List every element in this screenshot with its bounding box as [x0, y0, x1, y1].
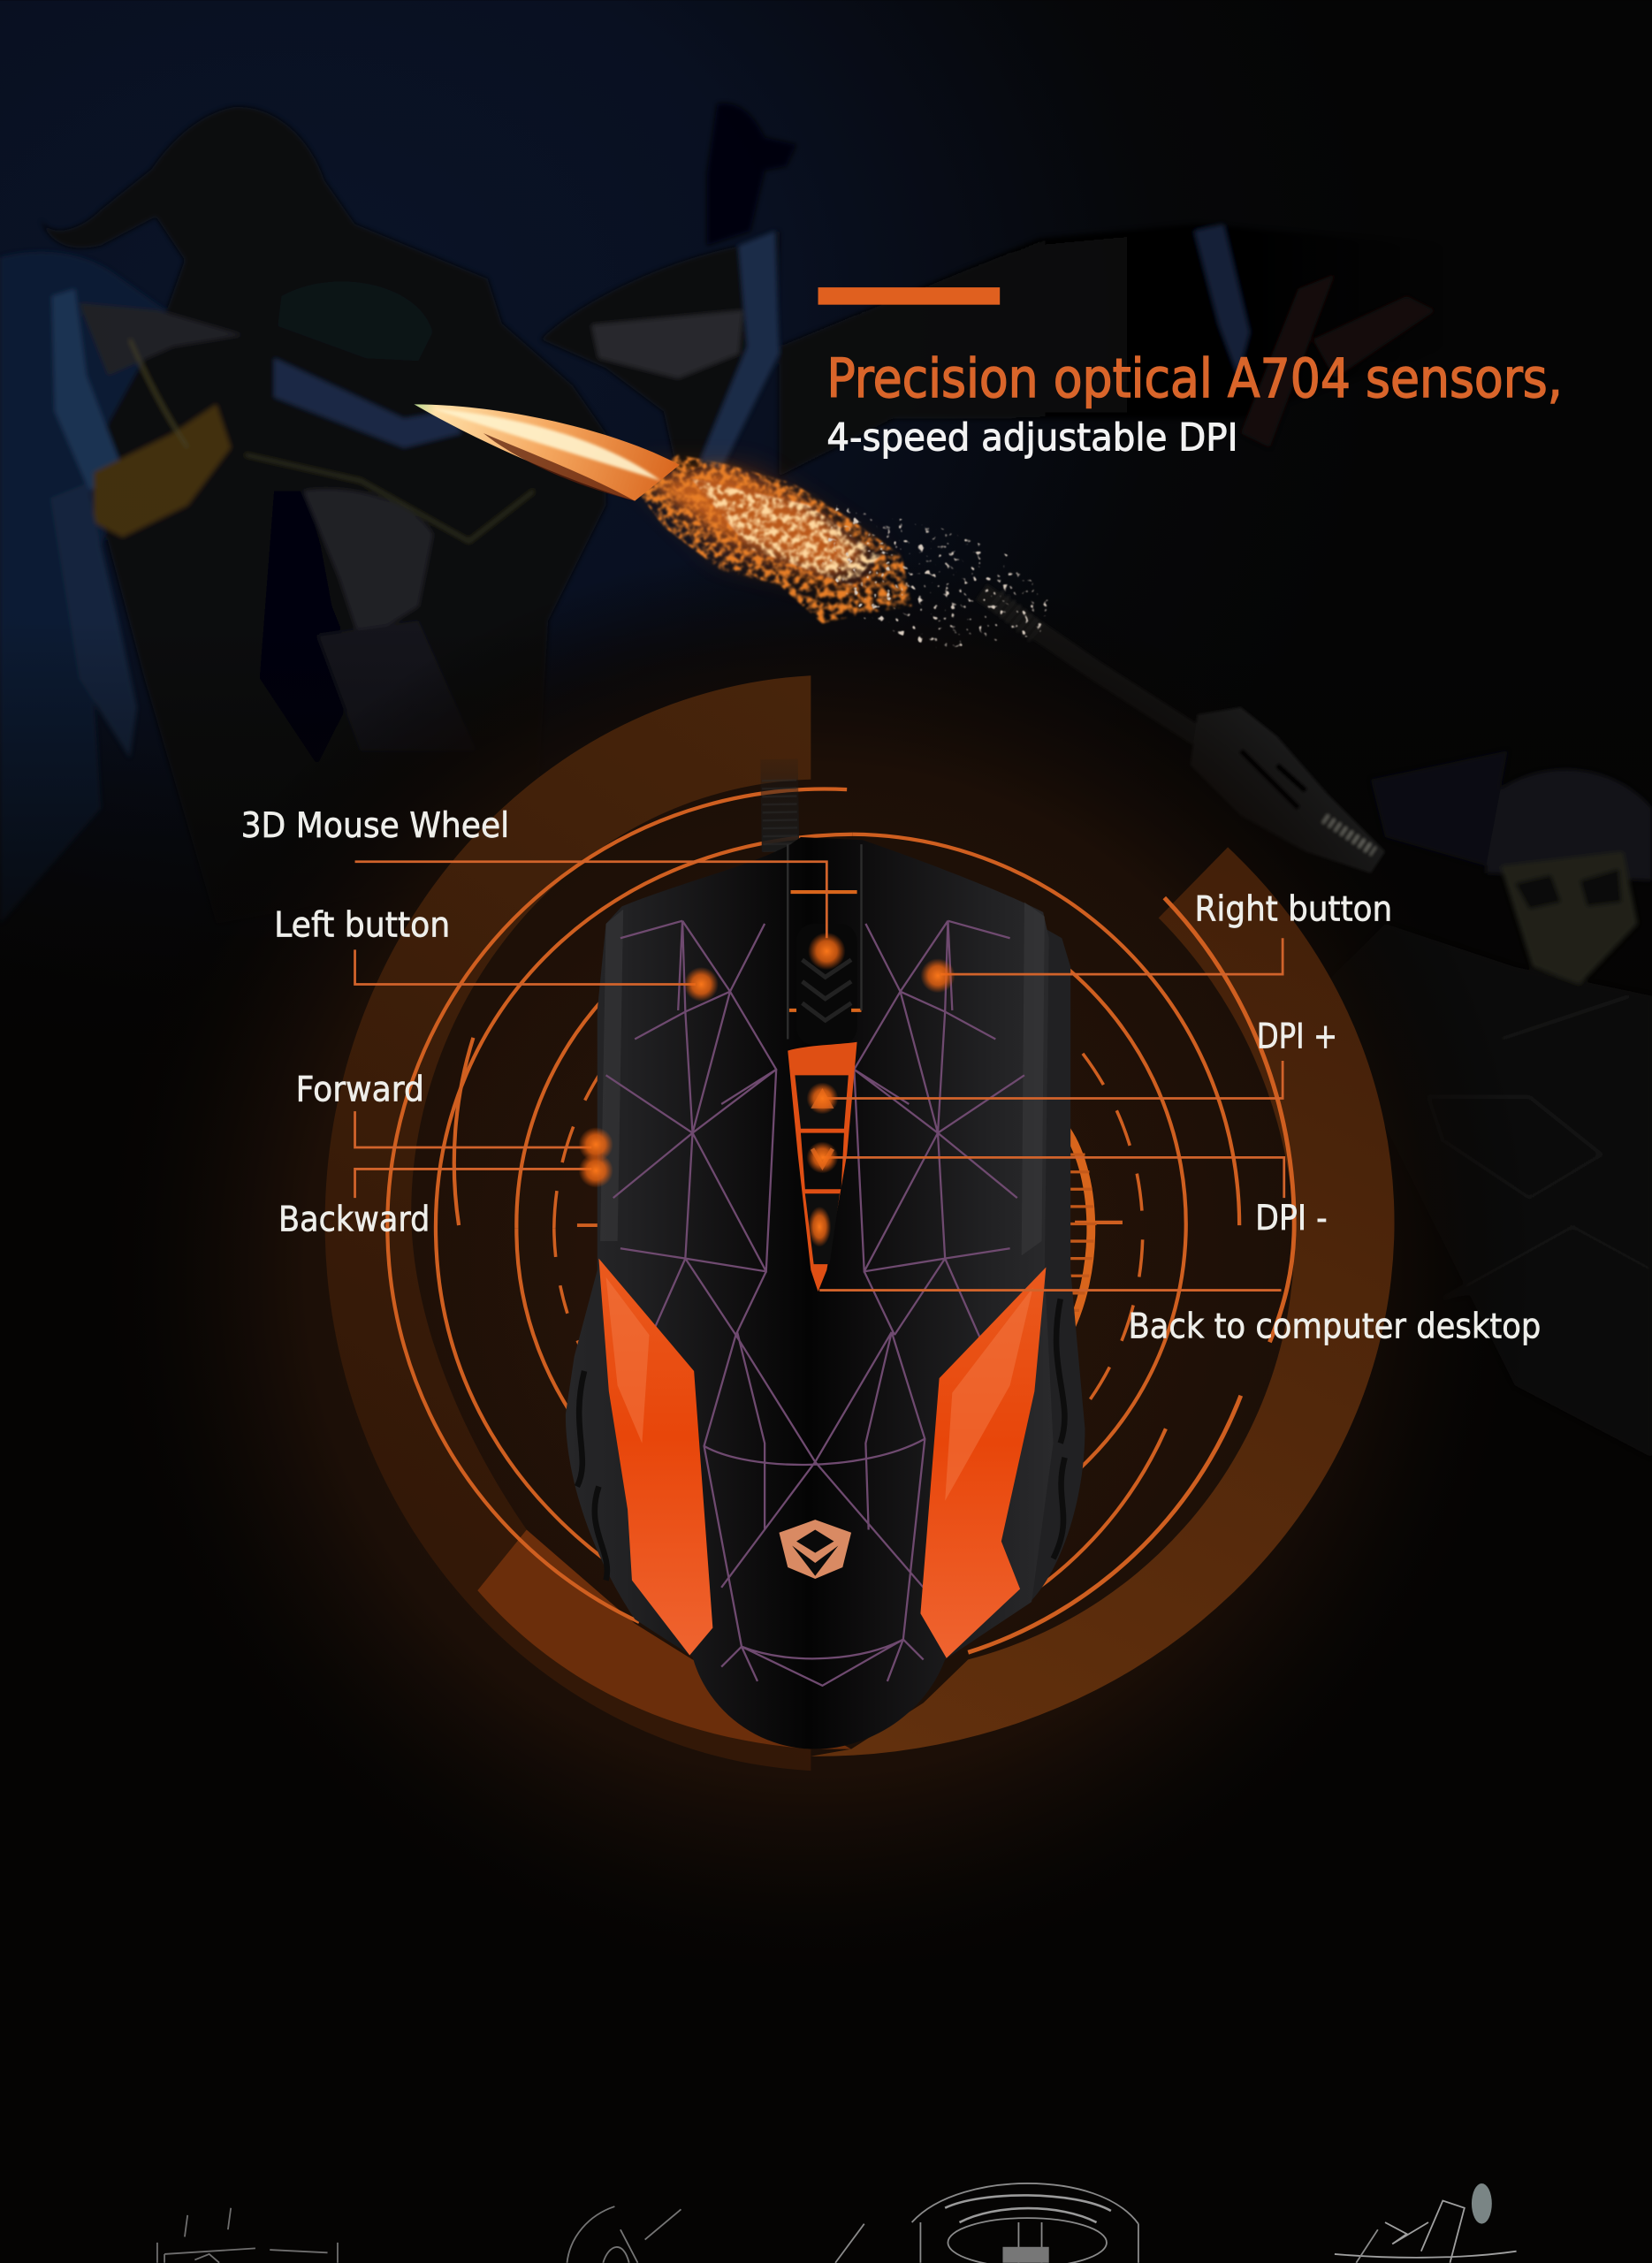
center orange strip	[788, 1042, 857, 1292]
raised fist	[707, 103, 796, 246]
rope	[130, 339, 187, 447]
warm glow behind rings	[89, 549, 1533, 1992]
outer left ring	[387, 789, 847, 1622]
rifle grip	[995, 599, 1039, 635]
right arm cuff	[541, 231, 779, 476]
chest	[317, 621, 476, 751]
right orange panel	[920, 1267, 1046, 1658]
hotspot markers	[579, 933, 955, 1247]
leader: Left button	[355, 949, 696, 985]
mouse left grip texture	[577, 1371, 607, 1581]
lower right heavy arc	[968, 1396, 1241, 1652]
far hand fingers	[1241, 274, 1435, 447]
bullet body	[414, 404, 680, 501]
left tick	[577, 1224, 600, 1226]
fire particles	[632, 454, 912, 623]
illustration: skull soldier	[1298, 751, 1652, 1458]
second left ring	[436, 834, 853, 1573]
white sparks	[822, 506, 1054, 650]
leader: 3D Mouse Wheel	[355, 862, 826, 938]
callout leader lines	[355, 862, 1284, 1291]
soldier chest lines	[1428, 996, 1652, 1299]
sketch icon 4	[1335, 2183, 1517, 2263]
left band bright segment	[477, 1530, 851, 1749]
right heavy arc	[1164, 898, 1294, 1342]
soldier body	[1298, 924, 1652, 1458]
bullet highlight	[433, 408, 661, 481]
sketch icon 3	[835, 2183, 1138, 2263]
hat band	[274, 358, 461, 447]
inner ring lower left	[516, 1228, 606, 1458]
label: 3D Mouse Wheel: 3D Mouse Wheel	[241, 806, 509, 846]
rifle barrel	[981, 592, 1198, 736]
leader: DPI plus	[826, 1061, 1283, 1098]
accent bar	[818, 287, 1000, 305]
bullet shadow	[483, 433, 635, 501]
leader: Right button	[940, 938, 1283, 974]
left arc band	[325, 675, 811, 1771]
mouse	[566, 759, 1085, 1749]
fire core	[650, 469, 865, 575]
illustration: rifle	[981, 592, 1385, 873]
mouse web pattern	[606, 921, 1024, 1686]
mouse body	[566, 837, 1054, 1749]
mouse side highlights	[600, 902, 1045, 1255]
dashed ring left lower	[554, 1228, 606, 1392]
far cuff	[1195, 224, 1250, 376]
label: Forward: Forward	[296, 1071, 424, 1110]
sketch icon 2	[567, 2206, 681, 2263]
label: Backward: Backward	[278, 1200, 430, 1240]
leader: Backward	[355, 1169, 591, 1198]
rifle vents	[1324, 819, 1374, 851]
hat brim	[144, 325, 606, 541]
left cuff inner	[80, 303, 242, 376]
hat outline	[245, 454, 534, 541]
illustration: cowboy character	[0, 103, 1443, 924]
sketch icon 1	[157, 2208, 338, 2263]
label: DPI plus: DPI +	[1257, 1017, 1337, 1056]
feature labels	[241, 806, 1541, 1346]
mouse right grip texture	[1054, 1299, 1065, 1558]
soldier helmet	[1486, 769, 1652, 880]
rifle detail	[1191, 707, 1385, 873]
leader: Forward	[355, 1111, 591, 1147]
glove	[94, 404, 231, 537]
bullet with fire trail	[414, 404, 1054, 650]
navy sky	[0, 0, 1652, 1054]
right arc band	[811, 847, 1395, 1756]
mouse logo	[779, 1520, 851, 1579]
label: Left button: Left button	[274, 906, 450, 946]
right cuff blue band	[700, 231, 779, 469]
left cuff	[52, 289, 123, 491]
lower fade over characters	[0, 621, 1652, 1054]
scroll wheel	[788, 844, 861, 1045]
dashed ring	[554, 937, 1143, 1487]
cowboy sleeve blue	[0, 252, 217, 924]
right panel highlight	[945, 1287, 1033, 1501]
cowboy silhouette	[41, 107, 606, 924]
skull eyes	[1515, 869, 1622, 910]
skull	[1501, 851, 1638, 985]
dpi buttons	[795, 1075, 849, 1264]
web left	[606, 921, 776, 1357]
leader: DPI minus	[822, 1157, 1284, 1198]
rifle rails	[1241, 751, 1306, 808]
gauge ticks	[1050, 1154, 1097, 1310]
label: DPI minus: DPI -	[1255, 1199, 1328, 1238]
soldier shoulder	[1371, 751, 1508, 866]
fire glow	[635, 469, 880, 592]
subtitle: 4-speed adjustable DPI	[826, 417, 1238, 461]
web right	[854, 921, 1024, 1357]
face	[303, 489, 433, 643]
right tick	[1075, 1222, 1123, 1223]
title: Precision optical A704 sensors,	[826, 348, 1563, 410]
mouse cable	[779, 759, 780, 851]
right cuff white	[591, 310, 743, 378]
left panel highlight	[606, 1277, 650, 1444]
label: Right button: Right button	[1195, 890, 1392, 930]
left orange panel	[598, 1259, 712, 1656]
collar strap	[50, 484, 137, 758]
hat crown highlight	[274, 281, 433, 361]
leader: Back to computer desktop	[819, 1290, 1281, 1292]
concentric rings	[387, 789, 1294, 1652]
right gauge	[1050, 1125, 1097, 1342]
web lower	[704, 1332, 925, 1686]
hair	[260, 491, 361, 765]
right upper sleeve	[779, 224, 1443, 476]
mouse side grip right	[995, 926, 1085, 1604]
bottom sketch icons	[157, 2183, 1517, 2263]
label: Back to computer desktop: Back to computer desktop	[1128, 1307, 1541, 1346]
gauge arc	[1063, 1125, 1091, 1342]
inner ring	[516, 889, 1186, 1467]
second right ring	[853, 834, 1239, 1225]
lower right second arc	[988, 1429, 1166, 1619]
short left arc	[454, 1038, 473, 1225]
